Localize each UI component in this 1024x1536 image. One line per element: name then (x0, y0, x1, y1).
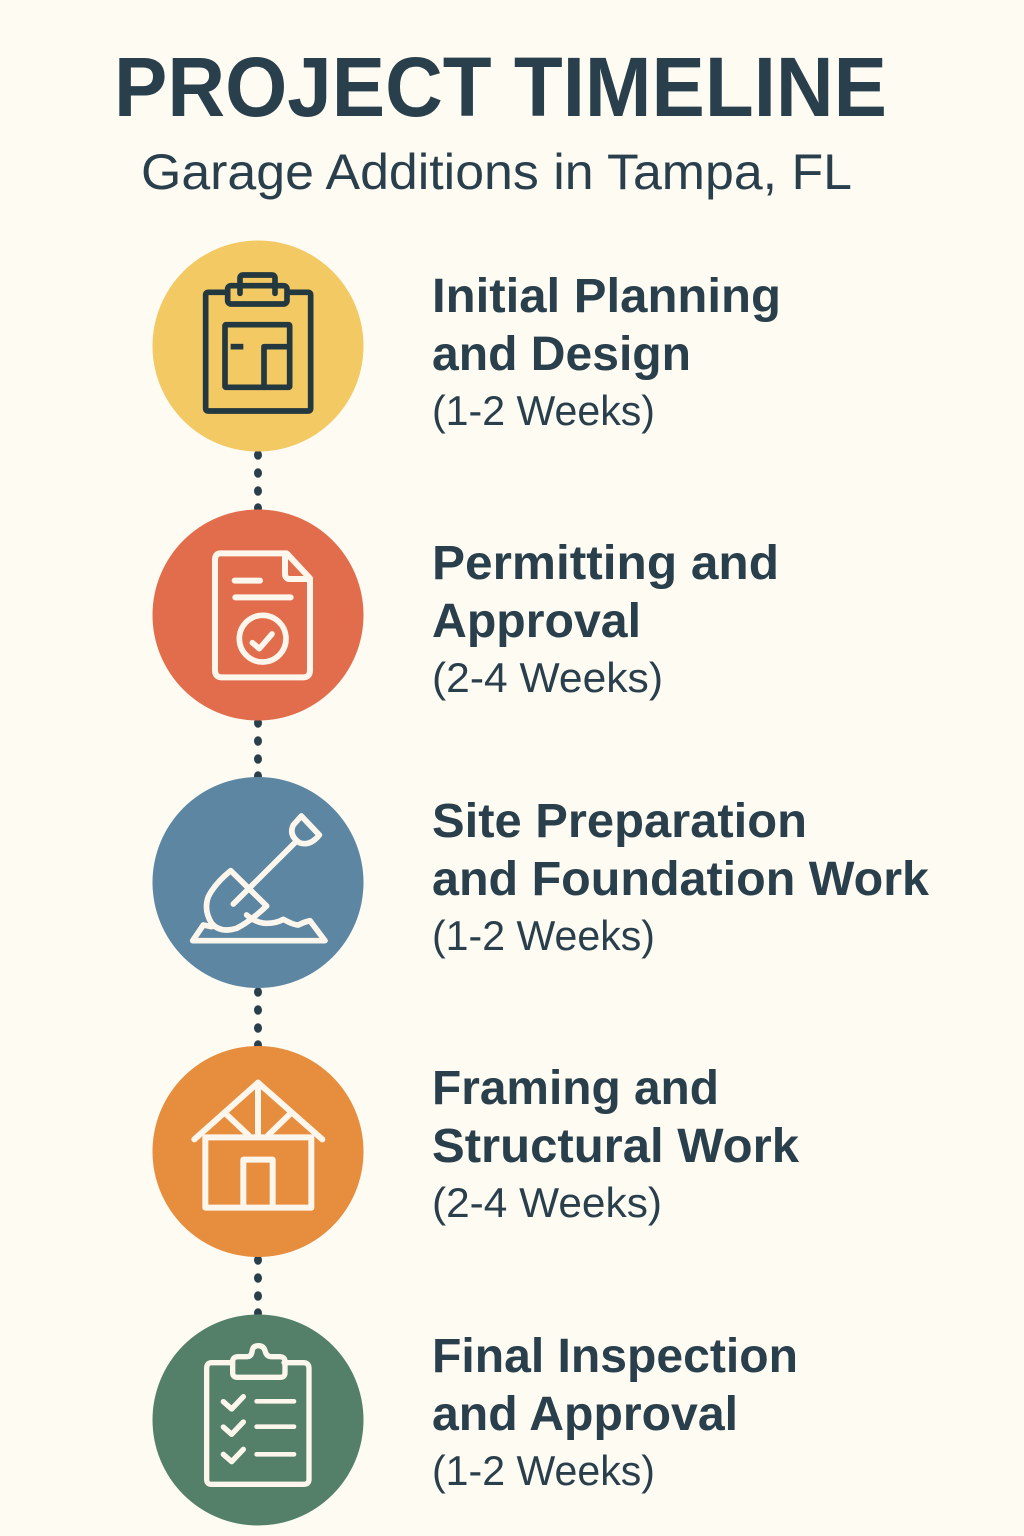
dotted connector 4 (254, 1255, 262, 1318)
step 3 text: Site Preparation (432, 795, 807, 848)
step 1 text: Initial Planning (432, 270, 781, 323)
step 5 text (432, 1330, 798, 1494)
step 4 text (432, 1062, 799, 1226)
step 1 text: (1-2 Weeks) (432, 387, 655, 434)
dotted connector 2 (254, 718, 262, 781)
step 4: framing (152, 1046, 799, 1257)
step 2 text (432, 537, 779, 701)
step 5 text: (1-2 Weeks) (432, 1447, 655, 1494)
red circle (152, 510, 364, 720)
dotted connector 1 (254, 450, 262, 513)
step 1 text (432, 270, 781, 434)
step 5: final inspection (152, 1314, 798, 1526)
icon: shovel in soil (193, 816, 325, 941)
icon: clipboard with floor plan (206, 275, 311, 411)
orange circle (152, 1046, 364, 1257)
step 4 text: Framing and (432, 1062, 719, 1115)
step 1: initial planning (152, 240, 781, 452)
step 3 text: (1-2 Weeks) (432, 912, 655, 959)
blue circle (152, 777, 364, 988)
step 4 text: (2-4 Weeks) (432, 1179, 662, 1226)
step 4 text: Structural Work (432, 1120, 799, 1173)
step 2 text: (2-4 Weeks) (432, 654, 663, 701)
yellow circle (152, 240, 364, 452)
icon: approved document (215, 553, 310, 677)
step 3: site preparation (152, 777, 929, 988)
subtitle: Garage Additions in Tampa, FL (141, 144, 852, 200)
icon: house frame (194, 1083, 322, 1208)
title: PROJECT TIMELINE (114, 40, 887, 134)
step 1 text: and Design (432, 328, 691, 381)
step 3 text: and Foundation Work (432, 853, 929, 906)
green circle (152, 1314, 364, 1526)
dotted connector 3 (254, 987, 262, 1050)
step 5 text: and Approval (432, 1388, 738, 1441)
step 3 text (432, 795, 929, 959)
step 2 text: Approval (432, 595, 641, 648)
icon: checklist clipboard (207, 1346, 309, 1484)
step 2 text: Permitting and (432, 537, 779, 590)
step 5 text: Final Inspection (432, 1330, 798, 1383)
step 2: permitting (152, 510, 779, 720)
